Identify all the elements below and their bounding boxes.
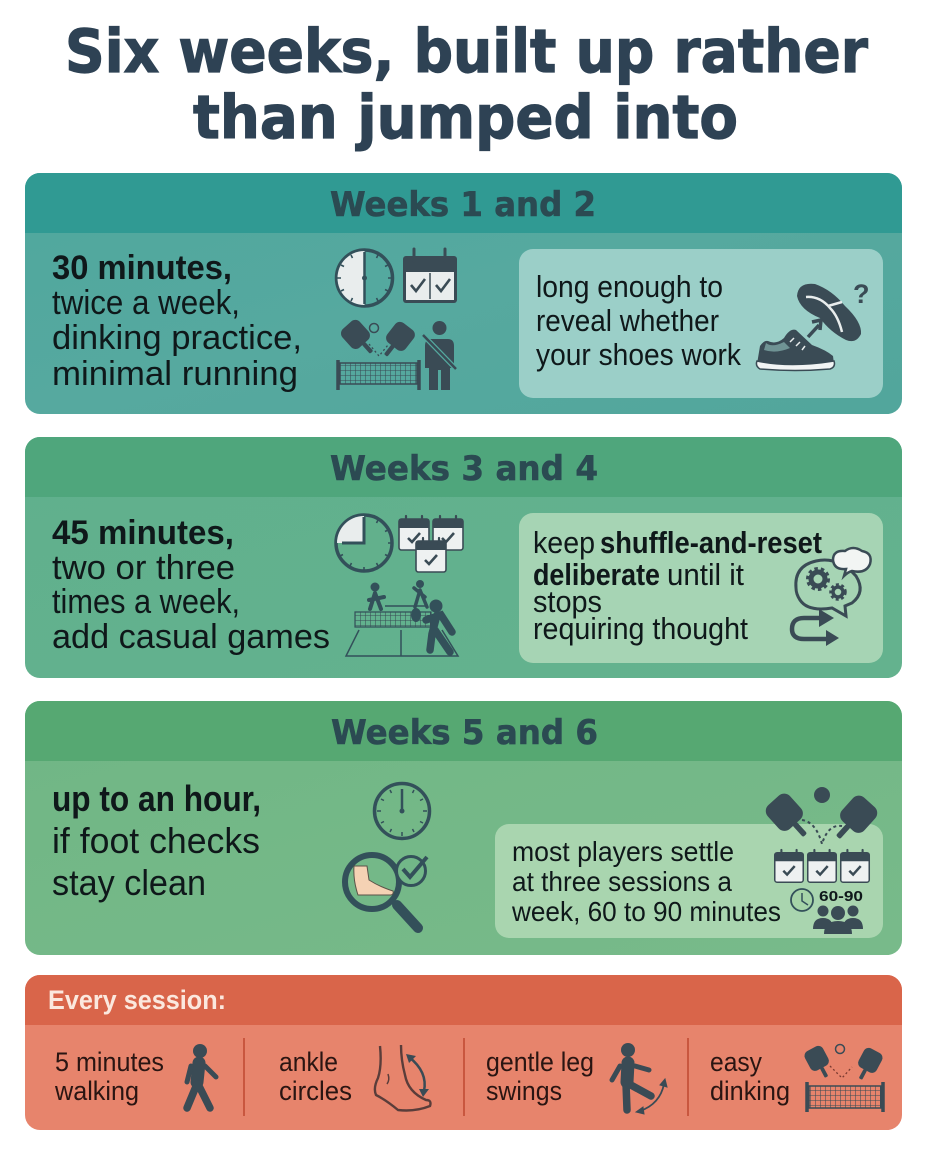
icon: small clock	[791, 889, 813, 911]
text: ankle circles	[279, 1047, 352, 1106]
callout: shoes: your shoes work	[536, 337, 741, 372]
text block: 30 minutes: 30 minutes,	[52, 249, 232, 287]
icon: leg swing person	[612, 1043, 667, 1114]
text block: 30 minutes: twice a week,	[52, 284, 240, 322]
icon: person with slash, no running	[423, 321, 456, 390]
panel: weeks 3 and 4	[25, 437, 902, 678]
callout: shoes: reveal whether	[536, 303, 719, 338]
text block: 30 minutes: minimal running	[52, 355, 298, 393]
text block: up to an hour: stay clean	[52, 862, 206, 903]
label: 60-90: 60-90	[819, 888, 863, 905]
icon: half-hour clock	[336, 250, 392, 306]
heading: weeks 3 and 4: Weeks 3 and 4	[330, 449, 598, 489]
callout: shuffle and reset: shuffle-and-reset	[600, 525, 822, 560]
icon: 45-minute clock	[336, 515, 392, 571]
heading: every session: Every session:	[48, 985, 226, 1015]
title	[65, 17, 868, 153]
callout: shuffle and reset: stops	[533, 584, 602, 619]
callout: shuffle and reset	[519, 513, 883, 663]
text: 5 minutes walking: 5 minutes	[55, 1047, 164, 1077]
text: easy dinking: dinking	[710, 1076, 790, 1106]
panel: weeks 1 and 2	[25, 173, 902, 414]
text: gentle leg swings: swings	[486, 1076, 562, 1106]
icon: shoe sole and sneaker	[756, 279, 870, 370]
callout: shoes: long enough to	[536, 269, 723, 304]
text block: 45 minutes: 45 minutes,	[52, 514, 234, 552]
text: ankle circles: ankle	[279, 1047, 338, 1077]
title: Six weeks, built up rather	[65, 17, 868, 87]
text block: 45 minutes	[52, 514, 330, 656]
callout: most players settle	[495, 787, 883, 938]
icon: ankle circle foot	[375, 1045, 430, 1110]
callout: shuffle and reset: until it	[667, 557, 744, 592]
icon: dinking paddles and net	[803, 1044, 884, 1112]
text block: up to an hour: if foot checks	[52, 820, 260, 861]
icon: paddles and net	[338, 317, 419, 390]
callout: shuffle and reset: requiring thought	[533, 611, 748, 646]
text: 5 minutes walking: walking	[54, 1076, 139, 1106]
text: easy dinking: easy	[710, 1047, 762, 1077]
icon: three weekly calendars	[775, 850, 869, 882]
callout: most players settle: most players settle	[512, 836, 734, 867]
icon: thinking head with gears	[792, 548, 871, 646]
panel: every session	[25, 975, 902, 1130]
icon: one-hour clock	[374, 784, 430, 838]
text: gentle leg swings: gentle leg	[486, 1047, 594, 1077]
title: than jumped into	[193, 83, 738, 153]
text block: 45 minutes: two or three	[52, 549, 235, 587]
text: 5 minutes walking	[54, 1047, 164, 1106]
icon: shoe sole and sneaker: ?	[853, 279, 870, 309]
text block: 30 minutes	[52, 249, 302, 393]
icon: group of players	[813, 906, 863, 934]
text block: up to an hour: up to an hour,	[52, 778, 261, 819]
icon: three calendars	[399, 516, 463, 572]
text block: 30 minutes: dinking practice,	[52, 319, 302, 357]
text: easy dinking	[710, 1047, 790, 1106]
panel: weeks 5 and 6	[25, 701, 902, 955]
text block: 45 minutes: times a week,	[52, 583, 240, 621]
icon: magnifier checking foot	[345, 855, 427, 928]
callout: most players settle: week, 60 to 90 minutes	[511, 896, 781, 927]
heading: weeks 5 and 6: Weeks 5 and 6	[331, 713, 598, 753]
text block: 45 minutes: add casual games	[52, 618, 330, 656]
icon: calendar with two checks	[403, 249, 457, 303]
icon: walking person	[187, 1044, 216, 1108]
callout: shuffle and reset: keep	[533, 525, 595, 560]
text: gentle leg swings	[486, 1047, 594, 1106]
icon: paddles and ball	[762, 787, 881, 847]
callout: most players settle: at three sessions a	[512, 866, 732, 897]
callout: shoes	[519, 249, 883, 398]
icon: casual doubles game	[346, 580, 458, 656]
heading: weeks 1 and 2: Weeks 1 and 2	[330, 185, 596, 225]
text block: up to an hour	[52, 778, 261, 903]
text: ankle circles: circles	[279, 1076, 352, 1106]
callout: shuffle and reset: deliberate	[533, 557, 660, 592]
